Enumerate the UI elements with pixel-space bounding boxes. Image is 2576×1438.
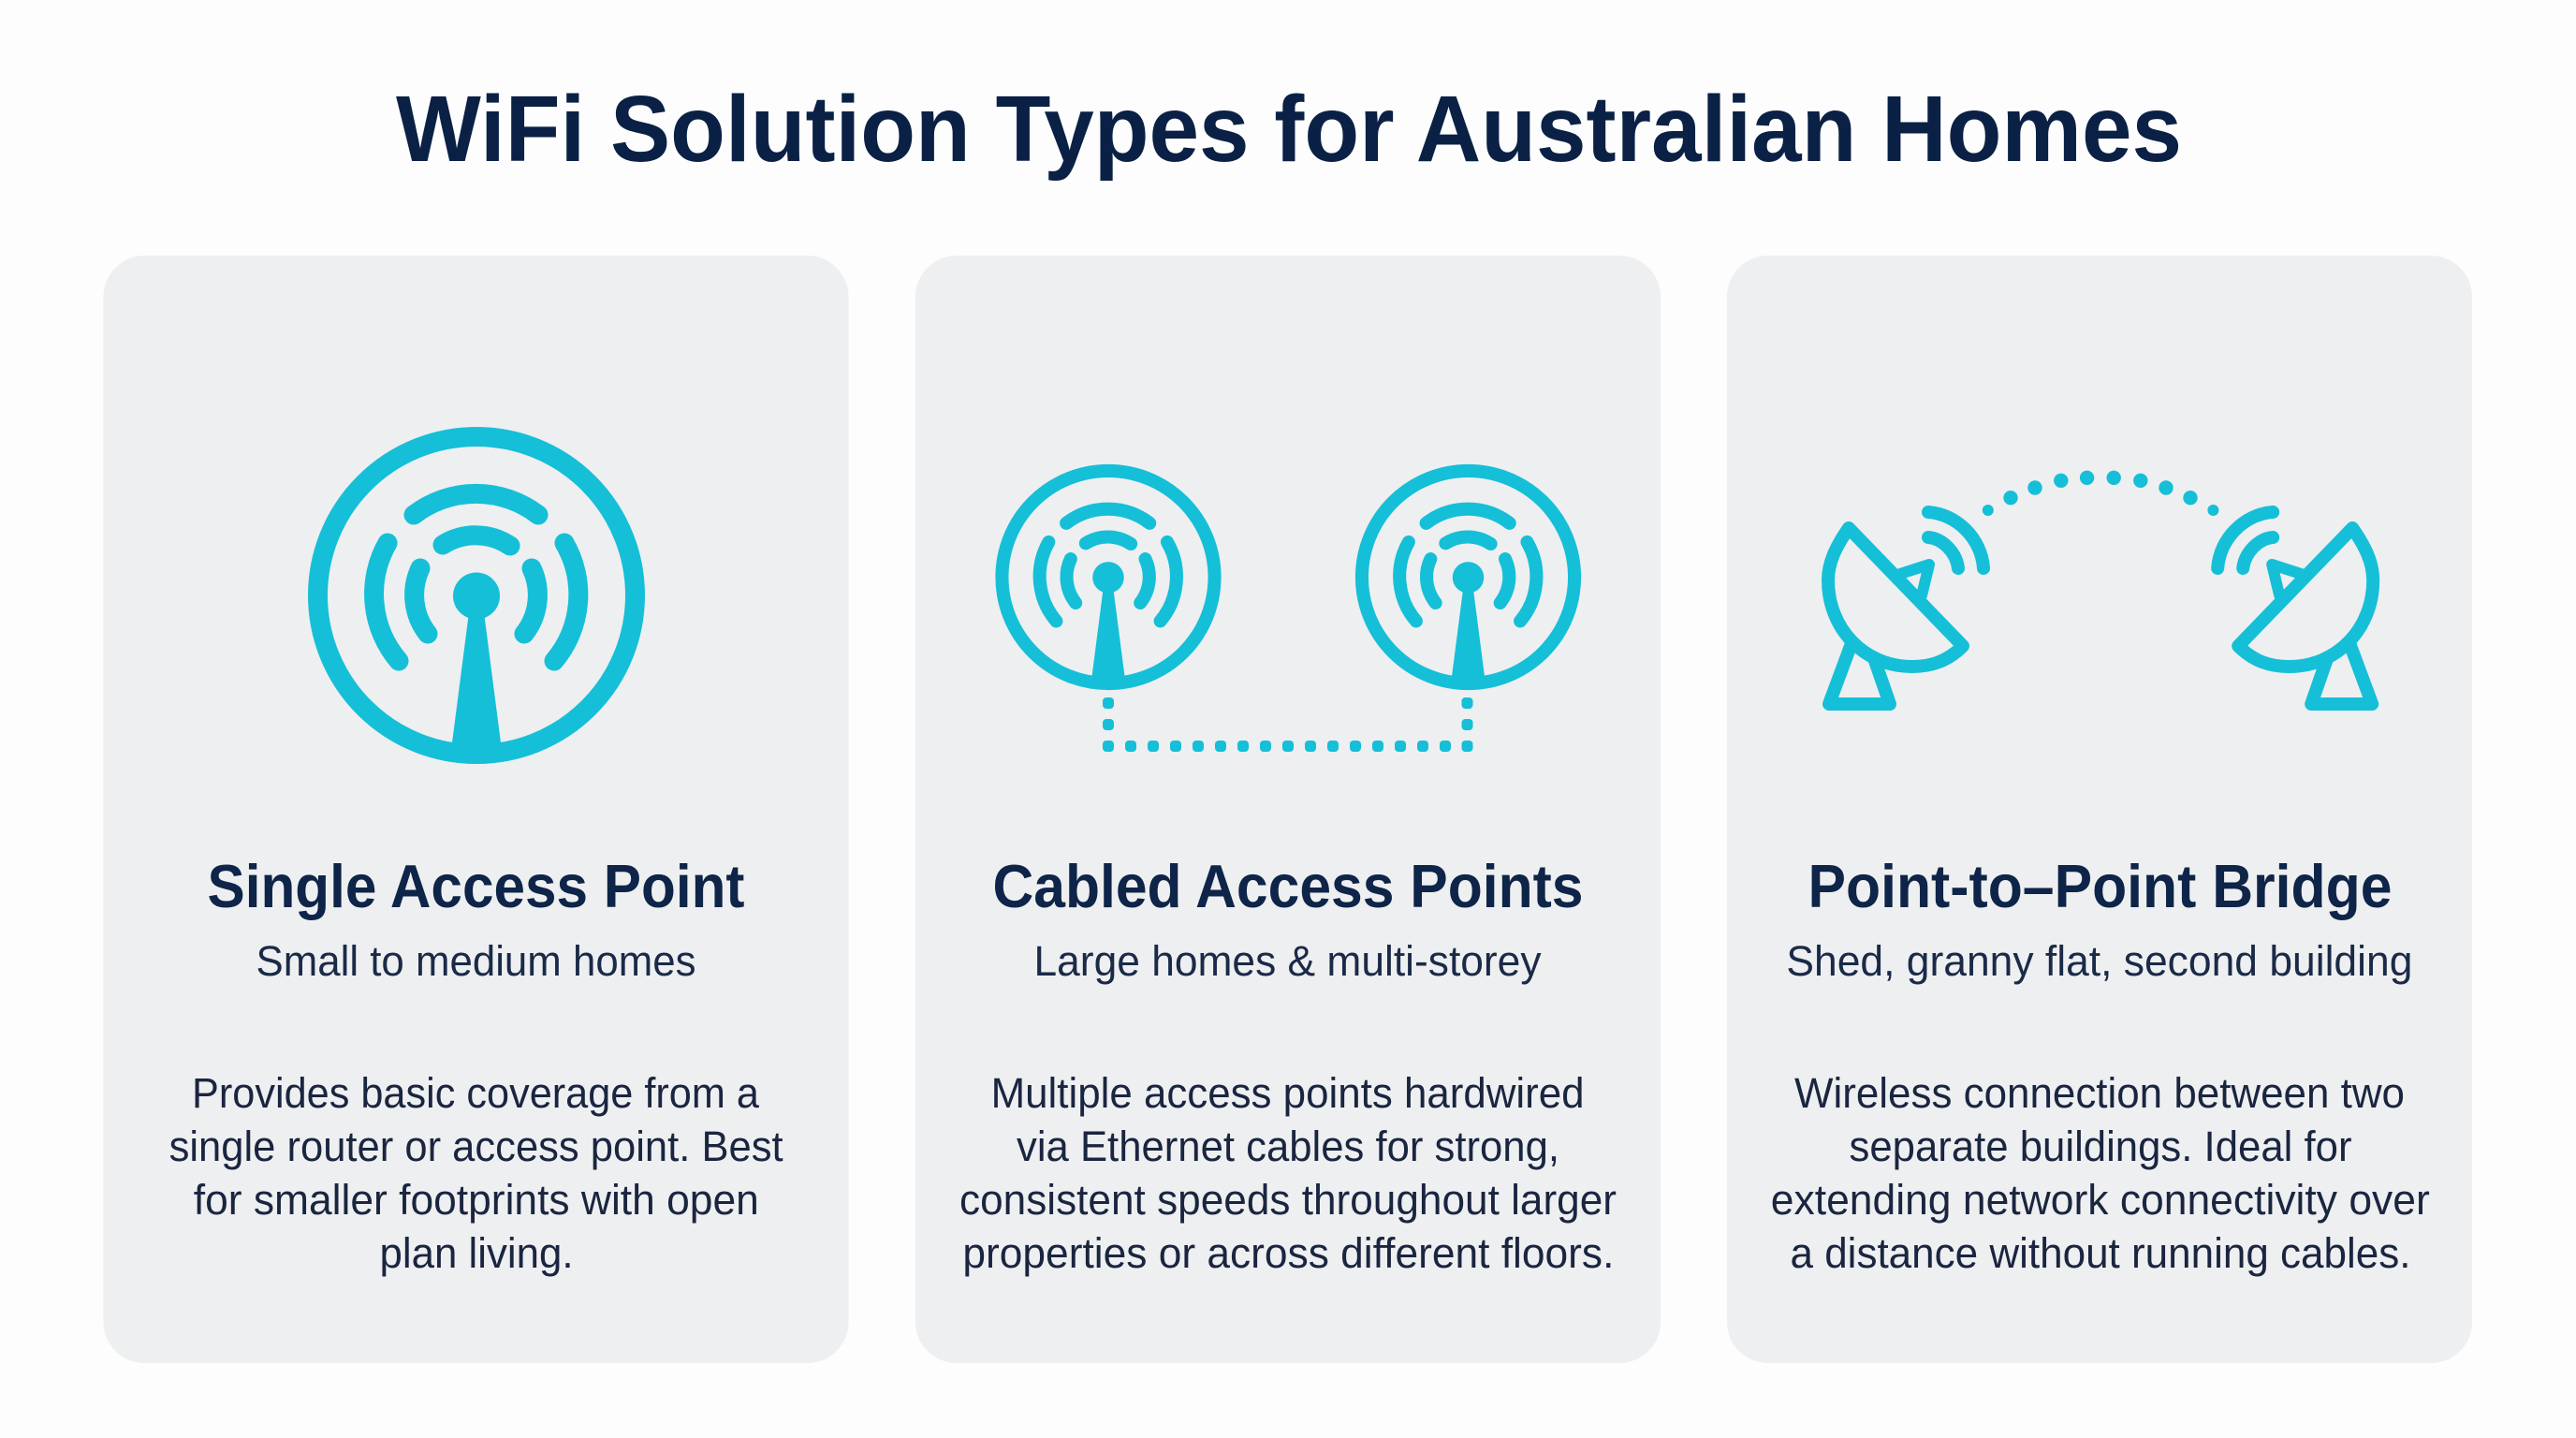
description: single access point: single router or access point. Best [169,1123,783,1170]
description: point-to-point bridge: extending network connectivity over [1771,1176,2430,1224]
description: cabled access points: properties or across different floors. [962,1229,1614,1277]
subheading: large homes and multi-storey: Large homes & multi-storey [1033,937,1542,985]
card background: cabled access points [915,256,1661,1363]
description: single access point [169,1069,783,1277]
icon: dotted wireless arc [1983,471,2218,516]
icon: left access point [1002,471,1215,683]
heading: cabled access points: Cabled Access Points [992,852,1584,920]
description: point-to-point bridge: separate buildings. Ideal for [1850,1123,2352,1170]
heading: point-to-point bridge: Point-to–Point Bridge [1808,852,2393,920]
card background: point-to-point bridge [1727,256,2472,1363]
icon: dotted ethernet cable connection [1103,697,1473,752]
description: single access point: plan living. [380,1229,573,1277]
description: point-to-point bridge: Wireless connection between two [1794,1069,2405,1117]
icon: left satellite dish [1828,512,1983,704]
panel: point-to-point bridge [1727,256,2472,1363]
description: single access point: for smaller footprints with open [194,1176,759,1224]
heading: single access point: Single Access Point [208,852,745,920]
description: cabled access points: consistent speeds throughout larger [959,1176,1617,1224]
icon: right access point [1362,471,1574,683]
panel: single access point [103,256,848,1363]
title: WiFi Solution Types for Australian Homes [396,77,2182,182]
card background: single access point [103,256,848,1363]
description: single access point: Provides basic coverage from a [192,1069,760,1117]
description: cabled access points: Multiple access points hardwired [991,1069,1585,1117]
description: cabled access points: via Ethernet cables for strong, [1017,1123,1559,1170]
icon: access point tower in circle [318,436,635,755]
description: point-to-point bridge [1771,1069,2430,1277]
description: point-to-point bridge: a distance without running cables. [1790,1229,2411,1277]
icon: right satellite dish [2217,512,2373,704]
panel: cabled access points [915,256,1661,1363]
subheading: small to medium homes: Small to medium homes [256,937,696,985]
subheading: shed, granny flat, second building: Shed, granny flat, second building [1786,937,2412,985]
description: cabled access points [959,1069,1617,1277]
